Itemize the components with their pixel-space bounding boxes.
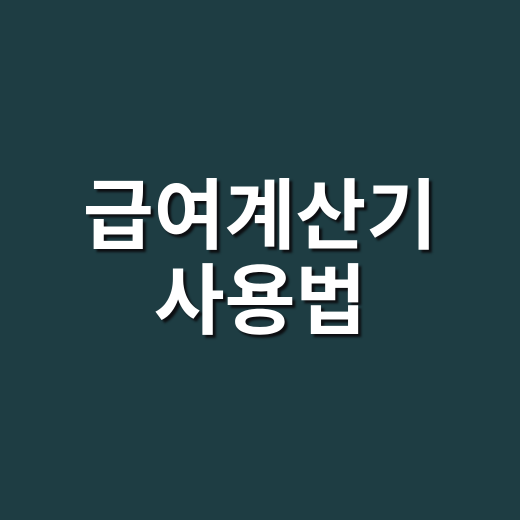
title: 사용법	[154, 259, 366, 345]
title: 급여계산기	[83, 174, 437, 260]
title	[83, 174, 437, 345]
